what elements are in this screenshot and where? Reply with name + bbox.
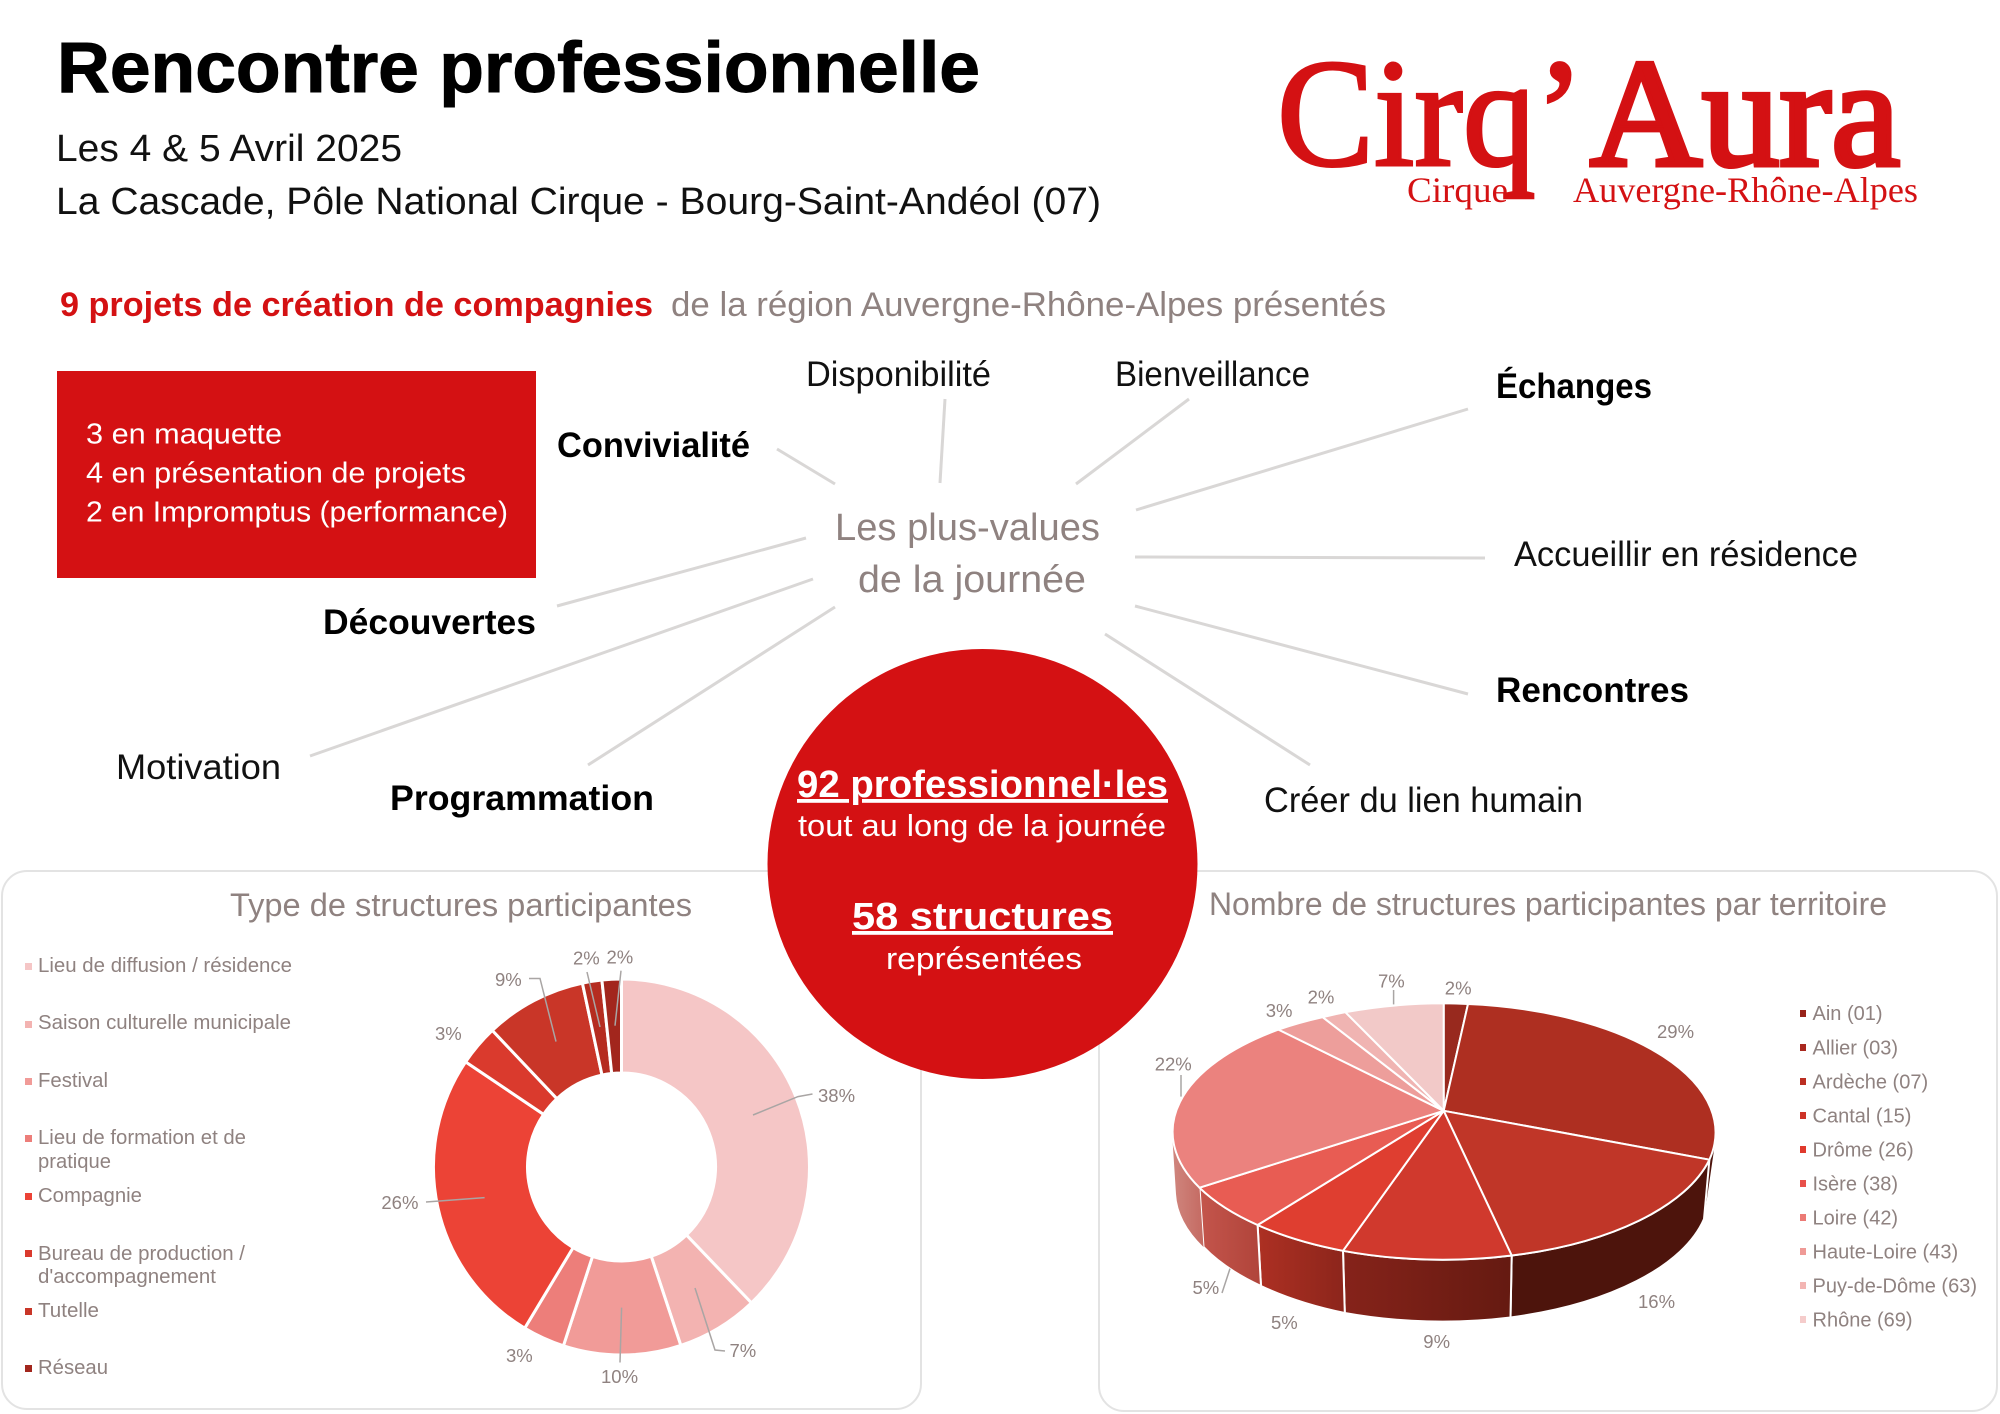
legend: territoires: Rhône (69) bbox=[1812, 1310, 1913, 1332]
panel: type de structures bbox=[2, 871, 921, 1409]
panel: project breakdown: 2 en Impromptus (performance) bbox=[86, 496, 508, 528]
pie percentage labels: 7% bbox=[1378, 970, 1405, 991]
donut percentage labels: 7% bbox=[730, 1340, 756, 1361]
callout: participation circle: tout au long de la journée bbox=[798, 808, 1166, 843]
donut percentage labels bbox=[381, 947, 855, 1387]
legend: type de structures: Compagnie bbox=[38, 1185, 142, 1207]
panel: project breakdown: 3 en maquette bbox=[86, 418, 282, 450]
donut percentage labels: 3% bbox=[435, 1023, 462, 1044]
logo: Cirq'Aura: Auvergne-Rhône-Alpes bbox=[1573, 170, 1918, 210]
pie percentage labels bbox=[1155, 970, 1694, 1352]
legend: type de structures: Tutelle bbox=[38, 1300, 99, 1322]
legend: territoires: Haute-Loire (43) bbox=[1812, 1242, 1958, 1264]
legend: territoires: Loire (42) bbox=[1812, 1208, 1898, 1230]
legend: type de structures: Réseau bbox=[38, 1357, 108, 1379]
legend: territoires: Ardèche (07) bbox=[1812, 1072, 1928, 1094]
legend: territoires: Ain (01) bbox=[1812, 1003, 1883, 1025]
logo: Cirq'Aura bbox=[1277, 29, 1918, 210]
heading: les plus-values de la journée: de la journée bbox=[858, 559, 1086, 601]
3D pie bbox=[1155, 970, 1716, 1352]
legend: territoires: Isère (38) bbox=[1812, 1174, 1898, 1196]
callout: participation circle: 92 professionnel·les bbox=[797, 764, 1168, 806]
donut chart bbox=[433, 979, 809, 1355]
legend: type de structures: Lieu de formation et de bbox=[38, 1127, 246, 1149]
donut percentage labels: 38% bbox=[818, 1085, 855, 1106]
subtitle: 9 projets: de la région Auvergne-Rhône-Alpes présentés bbox=[671, 286, 1386, 324]
subtitle: 9 projets: 9 projets de création de compagnies bbox=[60, 286, 653, 324]
pie percentage labels: 9% bbox=[1423, 1331, 1450, 1352]
legend: territoires bbox=[1800, 1003, 1977, 1332]
benefit labels: Accueillir en résidence bbox=[1514, 535, 1858, 574]
benefit labels: Échanges bbox=[1496, 366, 1652, 406]
spokes of the benefits diagram bbox=[310, 399, 1485, 765]
chart title: territoires: Nombre de structures participantes par territoire bbox=[1209, 886, 1887, 922]
event dates and place: La Cascade, Pôle National Cirque - Bourg-Saint-Andéol (07) bbox=[56, 181, 1101, 223]
legend: territoires: Allier (03) bbox=[1812, 1038, 1898, 1060]
title: Rencontre professionnelle bbox=[57, 29, 980, 108]
donut percentage labels: 3% bbox=[506, 1345, 533, 1366]
pie percentage labels: 5% bbox=[1271, 1312, 1298, 1333]
legend: territoires: Cantal (15) bbox=[1812, 1106, 1911, 1128]
donut percentage labels: 26% bbox=[381, 1192, 418, 1213]
benefit labels: Rencontres bbox=[1496, 671, 1689, 710]
pie percentage labels: 3% bbox=[1266, 1000, 1292, 1021]
legend: type de structures bbox=[25, 955, 292, 1379]
panel: project breakdown bbox=[57, 371, 536, 578]
benefit labels: Créer du lien humain bbox=[1264, 781, 1583, 820]
donut percentage labels: 9% bbox=[495, 969, 522, 990]
donut percentage labels: 2% bbox=[606, 947, 633, 968]
pie percentage labels: 29% bbox=[1657, 1021, 1694, 1042]
legend: type de structures: Lieu de diffusion / résidence bbox=[38, 955, 292, 977]
panel: project breakdown: 4 en présentation de projets bbox=[86, 458, 466, 490]
legend: territoires: Drôme (26) bbox=[1812, 1140, 1914, 1162]
benefit labels: Motivation bbox=[116, 748, 281, 787]
heading: les plus-values de la journée bbox=[835, 507, 1100, 601]
logo: Cirq'Aura: Cirque bbox=[1407, 170, 1508, 210]
pie percentage labels: 16% bbox=[1638, 1291, 1675, 1312]
pie percentage labels: 2% bbox=[1445, 978, 1472, 998]
subtitle: 9 projets bbox=[60, 286, 1386, 324]
benefit labels bbox=[116, 355, 1858, 820]
donut leader lines bbox=[426, 971, 812, 1362]
benefit labels: Bienveillance bbox=[1115, 355, 1310, 394]
3D pie top face bbox=[1173, 1003, 1716, 1260]
pie percentage labels: 22% bbox=[1155, 1054, 1192, 1075]
legend: territoires: Puy-de-Dôme (63) bbox=[1812, 1276, 1977, 1298]
heading: les plus-values de la journée: Les plus-values bbox=[835, 507, 1100, 549]
benefit labels: Découvertes bbox=[323, 603, 536, 642]
donut percentage labels: 10% bbox=[601, 1366, 638, 1387]
3D pie side walls bbox=[1172, 1132, 1716, 1322]
callout: participation circle: 58 structures bbox=[852, 896, 1113, 938]
callout: participation circle bbox=[768, 649, 1198, 1079]
legend: type de structures: pratique bbox=[38, 1151, 111, 1173]
pie leader lines bbox=[1181, 990, 1394, 1293]
benefit labels: Programmation bbox=[390, 779, 654, 818]
benefit labels: Convivialité bbox=[557, 426, 750, 465]
pie percentage labels: 2% bbox=[1308, 987, 1334, 1008]
chart title: type de structures: Type de structures participantes bbox=[230, 887, 692, 923]
legend: type de structures: Saison culturelle municipale bbox=[38, 1012, 291, 1034]
benefit labels: Disponibilité bbox=[806, 355, 991, 394]
donut percentage labels: 2% bbox=[573, 948, 600, 969]
event dates and place bbox=[56, 128, 1101, 223]
legend: type de structures: d'accompagnement bbox=[38, 1266, 216, 1288]
legend: type de structures: Bureau de production / bbox=[38, 1243, 245, 1265]
pie percentage labels: 5% bbox=[1192, 1277, 1219, 1298]
event dates and place: Les 4 & 5 Avril 2025 bbox=[56, 128, 402, 170]
logo: Cirq'Aura: Cirq’ bbox=[1277, 29, 1584, 199]
legend: type de structures: Festival bbox=[38, 1070, 108, 1092]
callout: participation circle: représentées bbox=[886, 941, 1082, 976]
logo: Cirq'Aura: Aura bbox=[1590, 29, 1900, 199]
panel: territoires bbox=[1099, 871, 1997, 1411]
